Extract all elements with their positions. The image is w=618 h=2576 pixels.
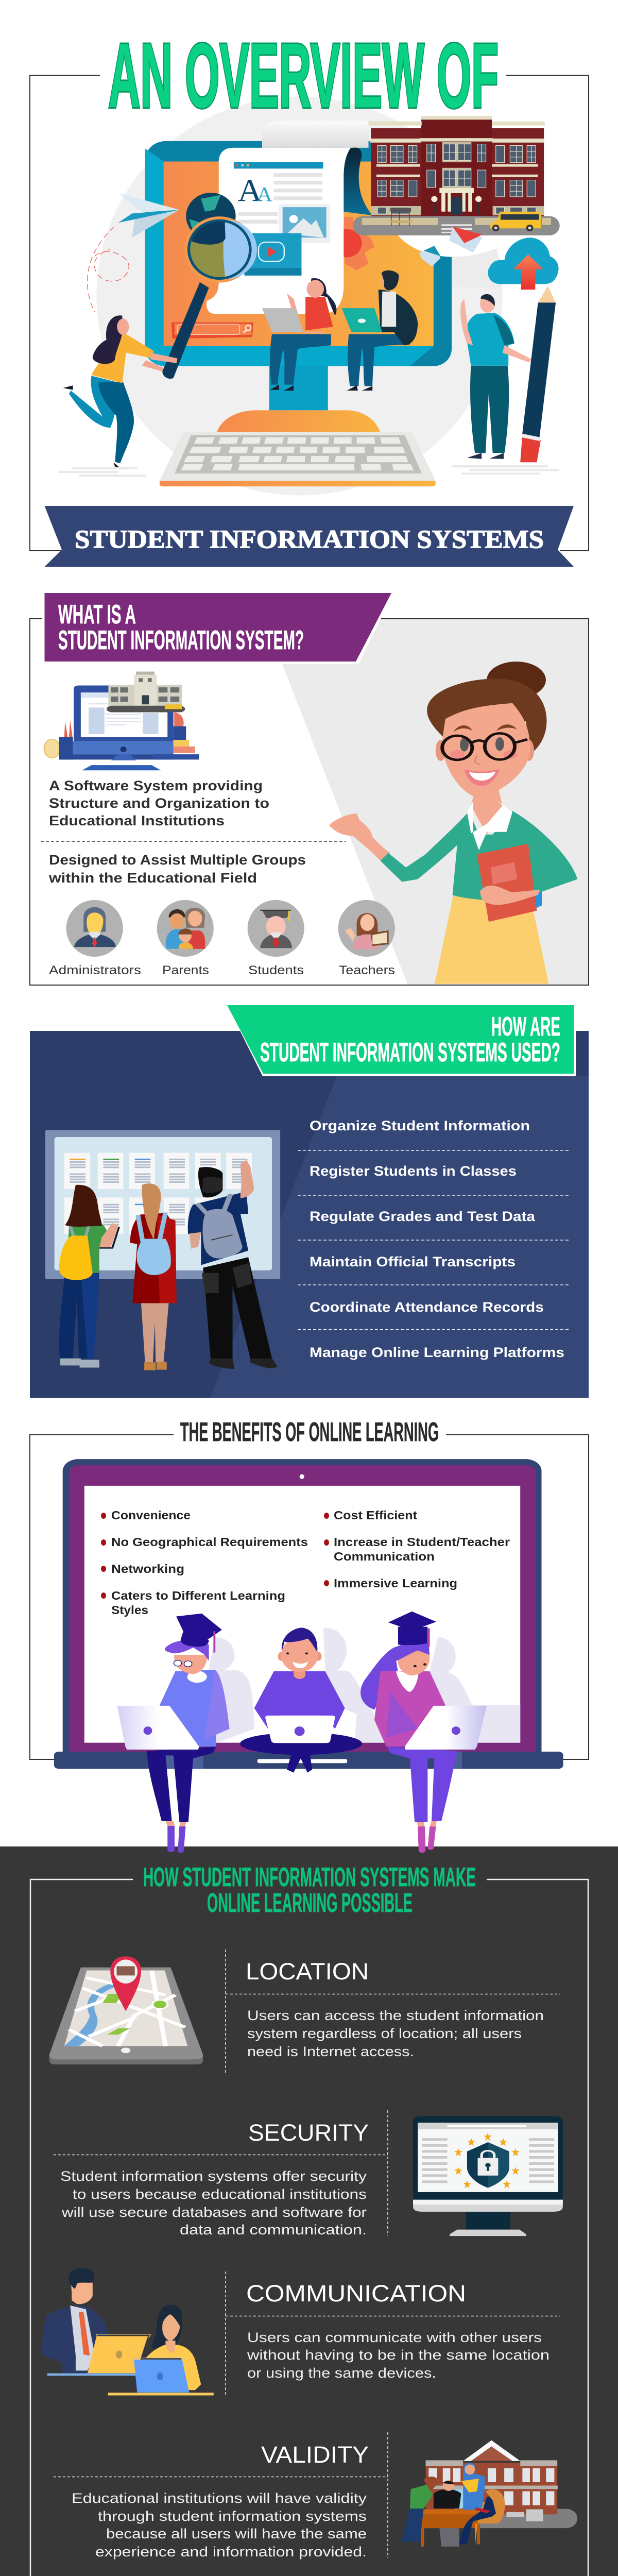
student: boy with backpack — [188, 1160, 278, 1369]
navy panel left tone — [30, 1031, 589, 1398]
heading line 2: ONLINE LEARNING POSSIBLE — [207, 1888, 413, 1918]
line 4: data and communication. — [180, 2222, 367, 2238]
header text line 1: WHAT IS A — [58, 600, 136, 630]
groups text — [48, 852, 306, 886]
neck and collar — [471, 790, 503, 835]
laptop base — [54, 1752, 563, 1769]
benefit: cost: Cost Efficient — [334, 1509, 417, 1522]
purple header — [44, 593, 393, 664]
icon: tablet map — [49, 1956, 203, 2064]
section: benefits of online learning — [0, 1417, 618, 1855]
section: how SIS make online learning possible — [0, 1855, 618, 2576]
panel frame — [30, 619, 589, 985]
line 4: experience and information provided. — [95, 2544, 367, 2560]
block: validity — [54, 2432, 577, 2560]
gray scroll fold — [452, 248, 501, 290]
item 2: Register Students in Classes — [310, 1163, 517, 1179]
benefit: learning styles: Caters to Different Learning — [111, 1589, 285, 1602]
gray teacher background — [282, 619, 589, 985]
header text line 2: STUDENT INFORMATION SYSTEM? — [58, 625, 304, 655]
label: administrators: Administrators — [49, 963, 141, 977]
computer — [451, 2488, 472, 2509]
envelopes — [420, 227, 483, 266]
block: communication — [42, 2268, 560, 2397]
group labels — [49, 963, 395, 977]
line 1: Designed to Assist Multiple Groups — [49, 852, 306, 868]
paper plane — [118, 193, 179, 238]
student: center — [240, 1628, 362, 1773]
illustration: three students — [117, 1612, 487, 1853]
location body — [247, 2008, 544, 2059]
icon: teachers — [338, 900, 395, 957]
security body — [60, 2168, 367, 2238]
item 4: Maintain Official Transcripts — [310, 1254, 516, 1269]
benefit: networking: Networking — [111, 1562, 184, 1575]
icon: two people with laptops — [42, 2268, 214, 2396]
person: man with pencil — [460, 294, 532, 459]
line 2: system regardless of location; all users — [247, 2026, 522, 2041]
laptop — [54, 1459, 563, 1769]
student in green — [410, 2484, 433, 2509]
section: hero — [29, 24, 589, 567]
item 5: Coordinate Attendance Records — [310, 1299, 544, 1315]
person: seated man — [342, 270, 418, 391]
benefits list left — [101, 1509, 308, 1617]
icon: secure monitor — [413, 2116, 563, 2236]
hero frame — [30, 75, 589, 551]
pencil — [520, 286, 556, 462]
benefit: communication: Increase in Student/Teacher — [334, 1535, 510, 1549]
background circle — [96, 96, 503, 495]
face — [441, 703, 530, 798]
keyboard — [160, 410, 436, 486]
document scroll — [207, 121, 372, 314]
student: girl with yellow bag — [59, 1185, 119, 1367]
smile — [465, 769, 500, 786]
dark panel top edge — [0, 1846, 618, 1855]
icon: school with students — [401, 2441, 577, 2547]
glasses — [442, 733, 527, 760]
skirt — [435, 895, 548, 984]
cardigan — [381, 811, 577, 900]
background silhouettes — [197, 1628, 520, 1743]
alarm clock — [44, 739, 60, 758]
navy panel right tone — [210, 1076, 589, 1398]
icon: administrators — [66, 900, 123, 957]
line 2: through student information systems — [98, 2509, 367, 2524]
line 3: or using the same devices. — [247, 2365, 436, 2381]
benefit: learning styles line 2: Styles — [111, 1603, 148, 1617]
computer monitor — [145, 141, 452, 410]
eyes — [460, 738, 469, 752]
line 3: because all users will have the same — [106, 2526, 367, 2541]
item 1: Organize Student Information — [310, 1118, 530, 1133]
hair — [427, 679, 547, 756]
line 1: Users can access the student information — [247, 2008, 544, 2023]
line 1: Users can communicate with other users — [247, 2330, 542, 2345]
line 3: need is Internet access. — [247, 2044, 414, 2059]
icon: parents — [157, 900, 214, 957]
line 2: Structure and Organization to — [49, 795, 269, 811]
student: right with cap — [360, 1612, 487, 1853]
block: location — [49, 1950, 560, 2075]
nose — [475, 756, 480, 764]
label: students: Students — [248, 963, 304, 977]
line 3: will use secure databases and software for — [61, 2205, 367, 2220]
line 2: to users because educational institutions — [73, 2187, 367, 2202]
hero illustration — [58, 96, 560, 495]
pencil cup — [64, 720, 73, 737]
benefit: communication line 2: Communication — [334, 1550, 435, 1563]
seated student with red book — [459, 2496, 501, 2544]
location heading: LOCATION — [246, 1958, 369, 1985]
line 1: A Software System providing — [49, 778, 263, 793]
usage list — [298, 1118, 571, 1360]
header text line 1: HOW ARE — [491, 1012, 560, 1042]
validity heading: VALIDITY — [261, 2442, 369, 2468]
books front — [477, 844, 537, 922]
communication body — [247, 2330, 550, 2381]
standing student with book — [463, 2463, 485, 2510]
person: seated woman — [262, 278, 336, 391]
student: left with cap — [117, 1614, 229, 1853]
definition text — [49, 778, 269, 828]
benefit: geography: No Geographical Requirements — [111, 1535, 308, 1549]
school bus — [490, 212, 541, 228]
ring of stars — [454, 2133, 520, 2188]
label: parents: Parents — [162, 963, 209, 977]
benefit: convenience: Convenience — [111, 1509, 191, 1522]
section: how are SIS used — [30, 1005, 589, 1398]
search bar — [171, 323, 253, 338]
banner title: STUDENT INFORMATION SYSTEMS — [75, 524, 544, 553]
icon: students — [248, 900, 304, 957]
noticeboard — [45, 1130, 280, 1279]
panel frame — [30, 1434, 589, 1759]
dark panel background — [0, 1855, 618, 2576]
magnifying glass — [162, 218, 257, 379]
security heading: SECURITY — [248, 2120, 369, 2146]
eyebrows — [453, 724, 517, 732]
benefits list right — [324, 1509, 510, 1590]
books back — [489, 840, 542, 908]
heading — [143, 1862, 476, 1918]
small school — [108, 685, 182, 706]
person: woman with magnifier — [63, 315, 177, 470]
ribbon banner — [44, 506, 574, 567]
floor shadows — [58, 465, 559, 477]
line 3: Educational Institutions — [49, 813, 225, 828]
gear — [332, 217, 374, 270]
table — [416, 2509, 486, 2514]
communication heading: COMMUNICATION — [246, 2280, 466, 2307]
globe — [186, 193, 236, 240]
cheeks — [450, 750, 465, 758]
monitor — [74, 685, 174, 741]
computer and school icon — [44, 671, 199, 770]
bullet markers — [324, 1513, 329, 1586]
books and plant — [174, 713, 184, 726]
document aA label: AA — [237, 173, 272, 208]
school building — [353, 116, 560, 235]
panel frame — [30, 1879, 588, 2576]
validity body — [72, 2490, 367, 2560]
white scroll cut — [394, 231, 501, 257]
block: security — [54, 2110, 563, 2238]
cloud upload — [488, 238, 559, 290]
teacher illustration — [329, 662, 577, 984]
line 2: without having to be in the same location — [247, 2347, 550, 2363]
group icons — [66, 900, 395, 957]
illustration: students at noticeboard — [45, 1130, 280, 1370]
label: teachers: Teachers — [339, 963, 395, 977]
hand on books — [480, 886, 540, 905]
green header — [227, 1005, 576, 1076]
item 3: Regulate Grades and Test Data — [310, 1209, 536, 1224]
benefit: immersive: Immersive Learning — [334, 1577, 457, 1590]
hair bun — [487, 662, 546, 699]
bullet markers — [101, 1513, 106, 1599]
section: what is a SIS — [29, 593, 589, 986]
line 1: Educational institutions will have validity — [72, 2490, 367, 2506]
ears — [436, 740, 446, 761]
line 2: within the Educational Field — [48, 870, 257, 886]
seated student in black — [434, 2489, 461, 2509]
line 1: Student information systems offer security — [60, 2168, 367, 2184]
map pin — [110, 1956, 141, 2011]
forearm and hand — [329, 814, 390, 861]
item 6: Manage Online Learning Platforms — [310, 1345, 564, 1360]
student: girl with blue bag — [130, 1183, 177, 1370]
dashed flight path — [88, 227, 129, 312]
